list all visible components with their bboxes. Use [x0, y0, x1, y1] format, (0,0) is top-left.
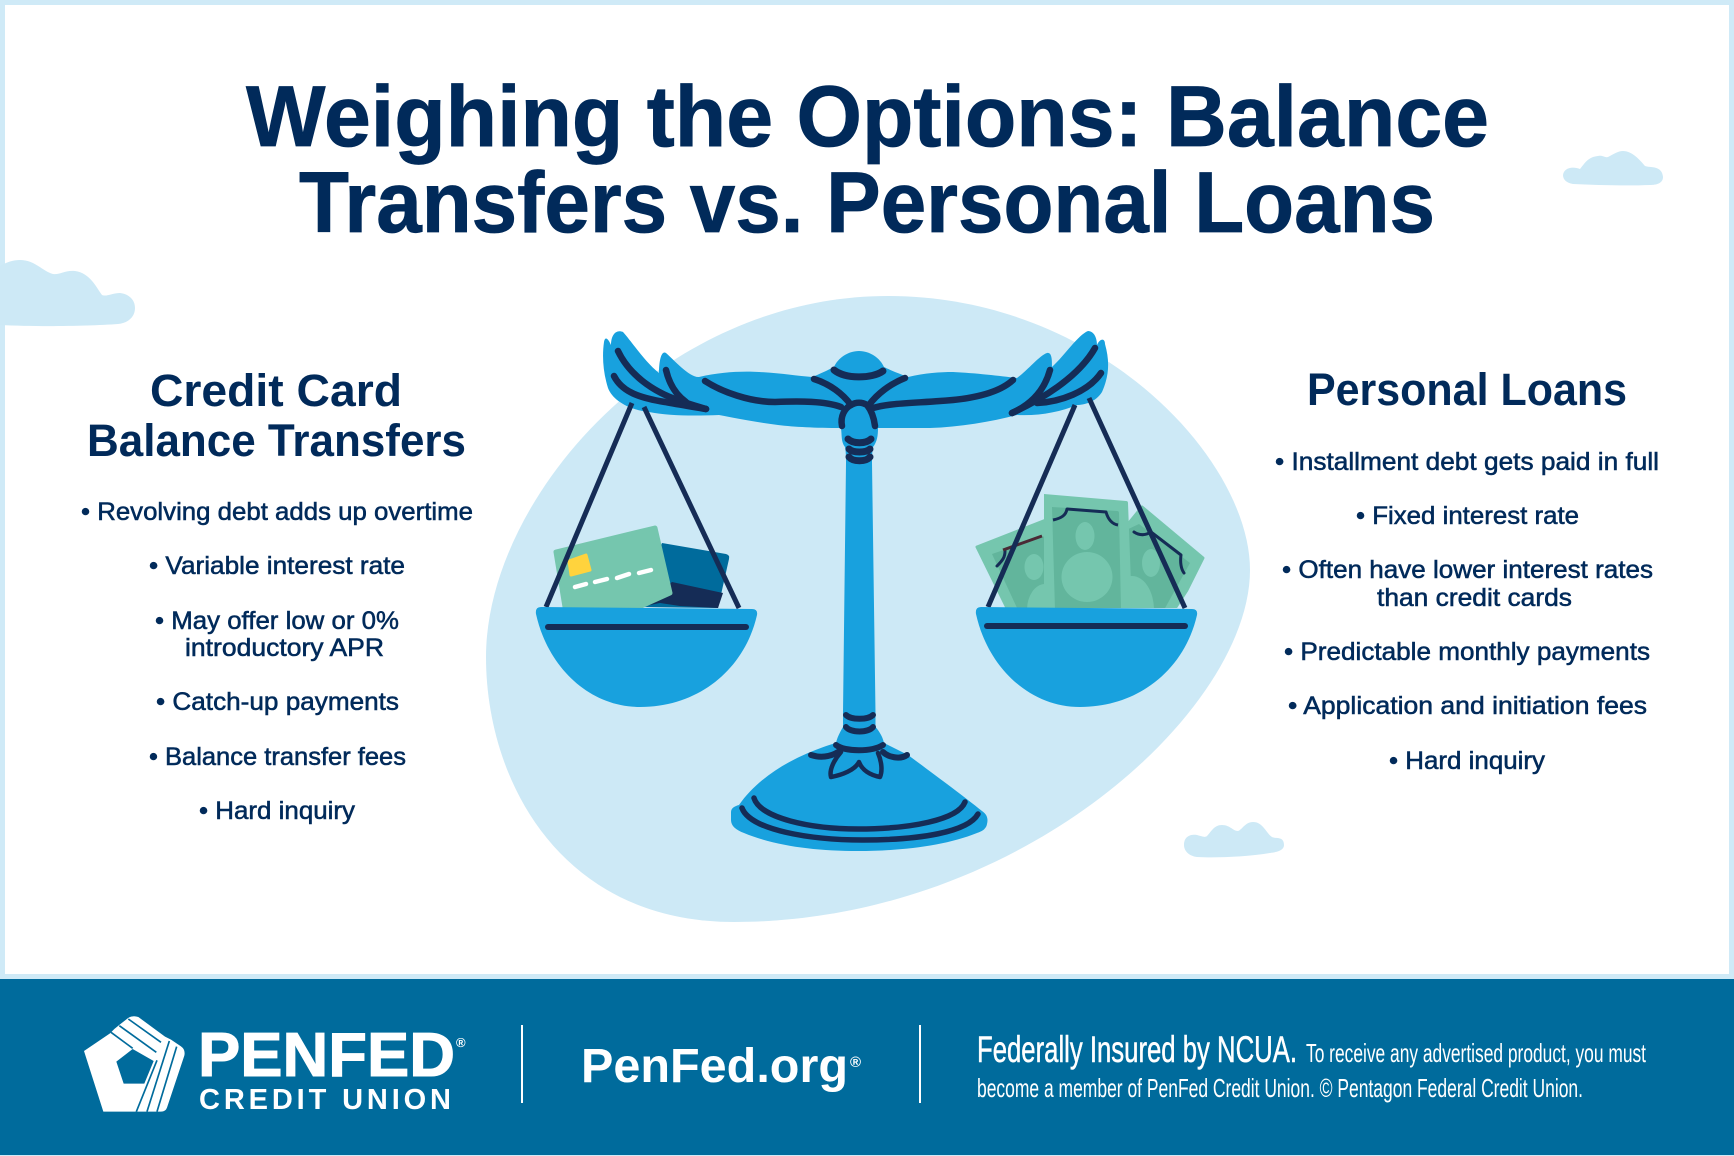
heading: credit card balance transfers: Credit Card — [150, 365, 402, 416]
list: credit card points: • Revolving debt adds up overtime — [81, 498, 473, 526]
logo: PenFed Credit Union — [84, 1016, 466, 1116]
left pan — [536, 607, 757, 707]
wordmark: PENFED — [198, 1021, 455, 1090]
disclaimer — [977, 1029, 1647, 1103]
list: personal loan points: • Application and initiation fees — [1288, 692, 1647, 720]
title — [246, 69, 1489, 251]
background blob — [486, 296, 1250, 922]
right pan — [976, 607, 1197, 707]
illustration: balance scale — [536, 331, 1203, 851]
list: personal loan points — [1275, 448, 1659, 775]
scale beam and stem — [603, 331, 1108, 851]
title: Weighing the Options: Balance — [246, 69, 1489, 165]
cloud: top right — [1563, 151, 1663, 185]
icon: cash bills — [976, 494, 1204, 608]
icon: credit cards — [556, 528, 729, 608]
right pan chains — [988, 398, 1185, 608]
divider — [919, 1025, 921, 1103]
list: credit card points: introductory APR — [185, 634, 384, 662]
list: personal loan points: • Hard inquiry — [1389, 747, 1546, 775]
heading: credit card balance transfers — [87, 365, 466, 466]
website: ® — [850, 1054, 861, 1071]
beam ornament lines — [614, 348, 1101, 840]
list: credit card points: • Balance transfer fees — [149, 743, 406, 771]
heading: credit card balance transfers: Balance Transfers — [87, 415, 466, 466]
list: personal loan points: than credit cards — [1377, 584, 1572, 612]
list: personal loan points: • Installment debt gets paid in full — [1275, 448, 1659, 476]
cloud: left — [0, 260, 135, 326]
footer band — [0, 979, 1734, 1155]
logo: PenFed Credit Union: CREDIT UNION — [199, 1084, 451, 1116]
panel: personal loans — [1275, 364, 1659, 775]
list: personal loan points: • Often have lower interest rates — [1282, 556, 1653, 584]
list: credit card points: • Variable interest rate — [149, 552, 405, 580]
icon: pentagon mark — [84, 1016, 185, 1112]
list: personal loan points: • Fixed interest rate — [1356, 502, 1579, 530]
list: credit card points — [81, 498, 473, 825]
cloud: bottom — [1184, 822, 1284, 857]
website: PenFed.org — [581, 1040, 848, 1093]
disclaimer: Federally Insured by NCUA. — [977, 1029, 1297, 1070]
left pan chains — [546, 403, 739, 608]
list: personal loan points: • Predictable monthly payments — [1284, 638, 1650, 666]
list: credit card points: • Catch-up payments — [156, 688, 399, 716]
title: Transfers vs. Personal Loans — [299, 155, 1435, 251]
divider — [521, 1025, 523, 1103]
heading: personal loans: Personal Loans — [1307, 364, 1627, 415]
panel: credit card balance transfers — [81, 365, 473, 825]
logo: PenFed Credit Union: ® — [456, 1035, 466, 1050]
list: credit card points: • Hard inquiry — [199, 797, 356, 825]
list: credit card points: • May offer low or 0% — [155, 607, 399, 635]
